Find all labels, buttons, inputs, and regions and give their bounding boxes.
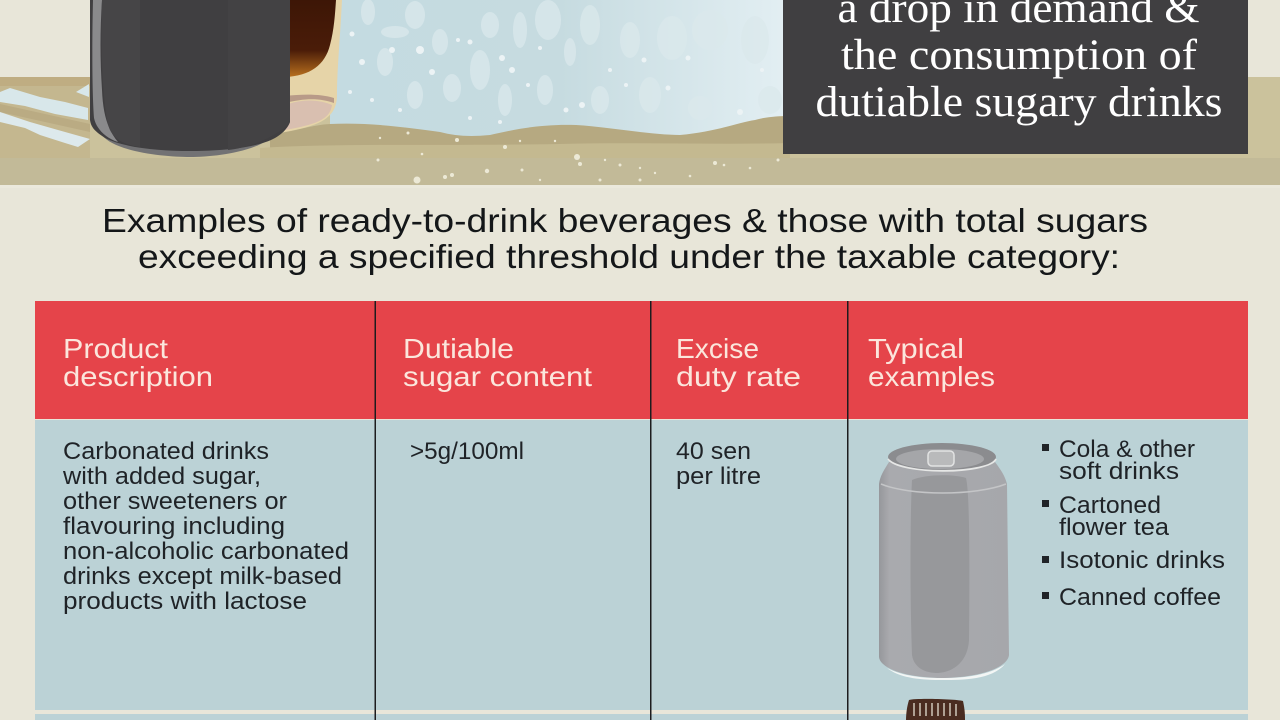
dutiable sugar content: >5g/100ml [410,438,524,465]
excise duty rate: 40 sen [676,438,751,465]
table header row: examples [868,361,995,392]
table header row: Dutiable [403,333,514,364]
glass of dark drink [284,0,342,132]
table header row: duty rate [676,361,801,392]
typical examples list [1042,436,1225,611]
hero illustration: drinks on a sandy ledge with ice [0,0,1280,188]
excise duty rate [676,438,761,490]
product description text: with added sugar, [62,463,261,490]
excise duty rate: per litre [676,463,761,490]
table header row: sugar content [403,361,592,392]
product description text: non-alcoholic carbonated [63,538,349,565]
typical examples list: Cola & other [1059,436,1195,463]
typical examples list: Cartoned [1059,492,1161,519]
ice streaks [0,88,88,120]
typical examples list: Isotonic drinks [1059,547,1225,574]
sand ridge [270,116,790,158]
product description text: other sweeteners or [63,488,287,515]
callout: dark panel with statement [783,0,1248,154]
product description text: flavouring including [63,513,285,540]
product description text: products with lactose [63,588,307,615]
table header row: Typical [868,333,964,364]
section heading [102,202,1148,275]
table header row: description [63,361,213,392]
product description text [62,438,349,615]
callout: dark panel with statement: the consumption of [841,32,1198,79]
callout: dark panel with statement: dutiable sugary drinks [816,79,1222,126]
speckles [376,132,780,184]
typical examples list: Canned coffee [1059,584,1221,611]
typical examples list: flower tea [1059,514,1170,541]
ice wall [330,0,790,140]
section heading: exceeding a specified threshold under the taxable category: [138,238,1120,275]
icon: silver drink can [879,443,1009,680]
table header row: Product [63,333,168,364]
product description text: Carbonated drinks [63,438,269,465]
dark can [90,0,290,157]
table body row: carbonated drinks [35,420,1248,720]
section heading: Examples of ready-to-drink beverages & those with total sugars [102,202,1148,239]
table of taxable beverages [35,301,1248,720]
table header row [35,301,1248,419]
column dividers [374,301,848,720]
typical examples list: soft drinks [1059,458,1179,485]
table header row: Excise [676,333,759,364]
icon: brown bottle cap [906,699,965,720]
product description text: drinks except milk-based [63,563,342,590]
